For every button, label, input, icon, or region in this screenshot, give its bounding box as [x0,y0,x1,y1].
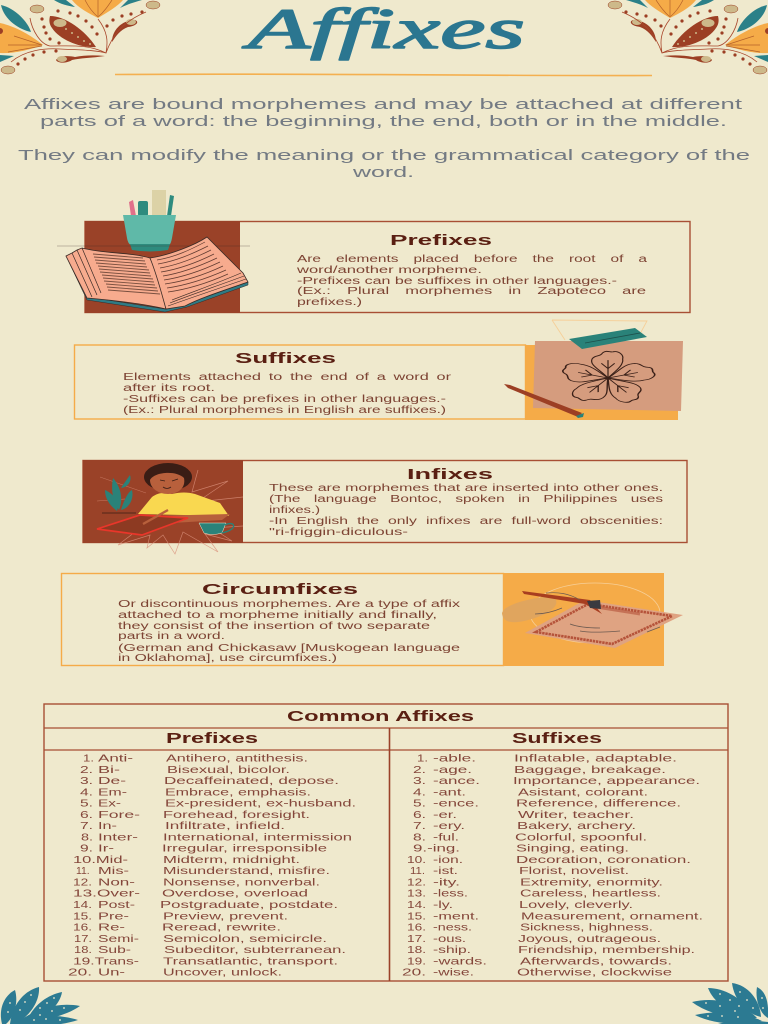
list: suffixes: Colorful, spoonful. [515,832,647,843]
list: prefixes: 5. [80,799,93,810]
text: circumfixes description: Or discontinuous morphemes. Are a type of affix [118,599,460,610]
list: suffixes: Afterwards, towards. [520,956,672,967]
list: suffixes: 9.-ing. [413,844,460,855]
list: prefixes: 11. [76,866,90,877]
list: suffixes: 13. [407,889,426,900]
table title: Common Affixes [287,709,474,725]
text: circumfixes description: in Oklahoma], use circumfixes.) [118,653,337,664]
text: prefixes description: word/another morpheme. [295,265,482,276]
ornament: top right floral corner [608,0,768,74]
list: suffixes: Otherwise, clockwise [517,968,672,979]
list: suffixes: 1. [417,754,428,764]
list: prefixes: Forehead, foresight. [163,810,310,821]
list: prefixes: International, intermission [163,832,352,843]
list: prefixes: 14. [73,900,92,911]
list: prefixes: 16. [73,923,92,934]
list: prefixes: Fore- [98,810,140,821]
list: prefixes: Irregular, irresponsible [162,844,327,855]
list: prefixes: Sub- [98,945,131,956]
intro text [18,97,750,181]
text: infixes description: (The language Bontoc, spoken in Philippines uses [269,494,663,505]
list: suffixes: 17. [407,934,426,945]
column heading: prefixes: Prefixes [166,731,258,747]
heading: suffixes: Suffixes [235,351,336,367]
text: circumfixes description: parts in a word. [118,631,225,642]
icon: drawing with taped paper and pencil [504,320,683,418]
list: suffixes [402,754,703,979]
list: prefixes: Uncover, unlock. [163,968,282,979]
list: prefixes: Bisexual, bicolor. [167,765,290,776]
list: prefixes: 4. [80,787,93,798]
icon: hand painting a frame [502,583,683,648]
text: circumfixes description [118,599,461,664]
list: suffixes: 10. [407,855,426,866]
panel: circumfixes [62,573,683,666]
list: suffixes: Inflatable, adaptable. [514,754,677,764]
icon: pencil cup [123,190,176,252]
list: suffixes: 8. [413,832,426,843]
list: prefixes: De- [98,776,126,787]
list: prefixes: Preview, prevent. [163,911,288,922]
text: infixes description: "ri-friggin-diculous- [269,527,408,538]
list: suffixes: Singing, eating. [516,844,629,855]
list: prefixes: Nonsense, nonverbal. [163,878,320,888]
list: suffixes: -less. [433,889,468,900]
text: circumfixes description: (German and Chickasaw [Muskogean language [118,643,461,654]
list: prefixes: Mis- [98,866,129,877]
list: prefixes: 10.Mid- [73,855,128,866]
title underline [115,74,652,76]
list: suffixes: -ant. [433,787,466,798]
list: prefixes: 15. [73,911,92,922]
list: suffixes: -able. [433,754,476,764]
list: prefixes: 17. [74,934,92,945]
text: suffixes description: -Suffixes can be prefixes in other languages.- [123,394,446,405]
list: prefixes: Overdose, overload [162,889,308,900]
panel: infixes [83,460,687,554]
list: prefixes: 13.Over- [73,889,140,900]
text: suffixes description [123,372,452,416]
list: prefixes: 18. [74,945,92,956]
list: suffixes: -ion. [433,855,463,866]
heading: infixes: Infixes [407,467,493,483]
list: suffixes: 16. [407,923,426,934]
text: suffixes description: after its root. [123,383,215,394]
ornament: top left floral corner [0,0,160,74]
list: prefixes: In- [98,821,117,832]
list: prefixes: Inter- [98,832,138,843]
column heading: suffixes: Suffixes [512,731,602,747]
list: suffixes: -ence. [433,799,479,810]
icon: person drawing at desk [97,463,243,554]
list: prefixes: Un- [98,968,125,979]
table: common affixes [44,704,728,981]
text: prefixes description: (Ex.: Plural morphemes in Zapoteco are [297,286,647,297]
list: suffixes: Careless, heartless. [520,889,661,900]
list: prefixes: Infiltrate, infield. [165,821,285,832]
list: suffixes: -er. [433,810,457,821]
list: suffixes: -ment. [433,911,479,922]
list: suffixes: 3. [413,776,426,787]
list: prefixes: Bi- [98,765,120,776]
text: prefixes description: -Prefixes can be suffixes in other languages.- [297,276,617,287]
list: suffixes: -ness. [433,923,472,934]
list: suffixes: 6. [413,810,426,821]
list: prefixes: Ex-president, ex-husband. [165,799,356,810]
text: infixes description: These are morphemes that are inserted into other ones. [269,483,663,494]
list: prefixes: Re- [98,923,125,934]
list: suffixes: Extremity, enormity. [520,878,663,888]
list: suffixes: -ity. [433,878,460,888]
list: suffixes: -ous. [433,934,466,945]
list: suffixes: -ery. [433,821,465,832]
heading: prefixes: Prefixes [390,233,492,249]
list: prefixes: Midterm, midnight. [163,855,300,866]
list: prefixes: Subeditor, subterranean. [164,945,346,956]
list: suffixes: Measurement, ornament. [521,911,703,922]
list: prefixes: Semi- [98,934,139,945]
text: prefixes description: prefixes.) [297,297,362,308]
list: suffixes: Lovely, cleverly. [519,900,633,911]
list: prefixes: 3. [80,776,93,787]
list: suffixes: -ist. [433,866,458,877]
decoration: bottom right leaves [692,983,768,1024]
list: suffixes: 18. [407,945,426,956]
list: suffixes: -age. [433,765,472,776]
icon: open book [66,237,248,312]
list: prefixes: Antihero, antithesis. [166,754,308,764]
text: prefixes description: Are elements placed before the root of a [297,254,648,265]
intro text: parts of a word: the beginning, the end, both or in the middle. [40,114,727,130]
list: prefixes: Anti- [98,754,133,764]
list: suffixes: 14. [407,900,426,911]
list: suffixes: Baggage, breakage. [514,765,666,776]
list: suffixes: -wards. [433,956,487,967]
list: prefixes: Postgraduate, postdate. [160,900,338,911]
intro text: They can modify the meaning or the grammatical category of the [18,148,750,164]
list: suffixes: 20. [402,968,426,979]
list: prefixes: 1. [83,754,94,764]
list: prefixes: 9. [80,844,93,855]
text: circumfixes description: attached to a morpheme initially and finally, [118,610,437,621]
text: infixes description: infixes.) [269,505,320,516]
list: prefixes: Semicolon, semicircle. [163,934,327,945]
list: suffixes: 15. [407,911,426,922]
text: infixes description [269,483,663,538]
list: suffixes: 12. [407,878,426,888]
list: prefixes: 12. [73,878,92,888]
list: prefixes: 7. [80,821,93,832]
list: suffixes: -ful. [433,832,459,843]
list: suffixes: -ly. [433,900,453,911]
intro text: Affixes are bound morphemes and may be attached at different [24,97,742,113]
list: suffixes: Bakery, archery. [517,821,636,832]
heading: circumfixes: Circumfixes [202,582,358,598]
list: suffixes: Friendship, membership. [518,945,695,956]
list: suffixes: 4. [413,787,426,798]
list: suffixes: Asistant, colorant. [518,787,648,798]
panel: suffixes [74,320,683,420]
list: prefixes: Transatlantic, transport. [163,956,338,967]
list: prefixes: 6. [80,810,93,821]
list: suffixes: Florist, novelist. [519,866,629,877]
list: suffixes: Importance, appearance. [513,776,700,787]
list: prefixes: 20. [68,968,92,979]
list: prefixes: Pre- [98,911,129,922]
list: prefixes: 8. [81,832,93,843]
intro text: word. [351,165,414,181]
text: suffixes description: Elements attached to the end of a word or [123,372,452,383]
list: prefixes: Post- [98,900,135,911]
list: suffixes: Sickness, highness. [520,923,653,934]
text: prefixes description [295,254,648,308]
list: prefixes: Ex- [98,799,121,810]
text: suffixes description: (Ex.: Plural morphemes in English are suffixes.) [123,405,446,416]
list: prefixes: Ir- [98,844,114,855]
panel: prefixes [57,190,690,313]
list: prefixes: 2. [80,765,93,776]
list: prefixes: Em- [98,787,127,798]
list: prefixes [68,754,356,979]
list: suffixes: 19. [407,956,426,967]
list: suffixes: Reference, difference. [516,799,681,810]
list: suffixes: -ship. [433,945,471,956]
list: suffixes: 5. [413,799,426,810]
list: suffixes: 7. [413,821,426,832]
list: suffixes: Writer, teacher. [518,810,634,821]
list: suffixes: -ance. [433,776,480,787]
text: circumfixes description: they consist of the insertion of two separate [118,621,431,632]
decoration: bottom left leaves [1,987,80,1024]
list: prefixes: Non- [98,878,135,888]
list: suffixes: Joyous, outrageous. [518,934,661,945]
list: prefixes: Decaffeinated, depose. [164,776,339,787]
list: suffixes: Decoration, coronation. [516,855,691,866]
list: prefixes: Embrace, emphasis. [165,787,311,798]
list: prefixes: 19.Trans- [73,956,139,967]
text: infixes description: -In English the only infixes are full-word obscenities: [269,516,663,527]
list: prefixes: Misunderstand, misfire. [163,866,330,877]
list: prefixes: Reread, rewrite. [162,923,281,934]
list: suffixes: -wise. [433,968,474,979]
list: suffixes: 2. [413,765,426,776]
list: suffixes: 11. [410,866,425,877]
